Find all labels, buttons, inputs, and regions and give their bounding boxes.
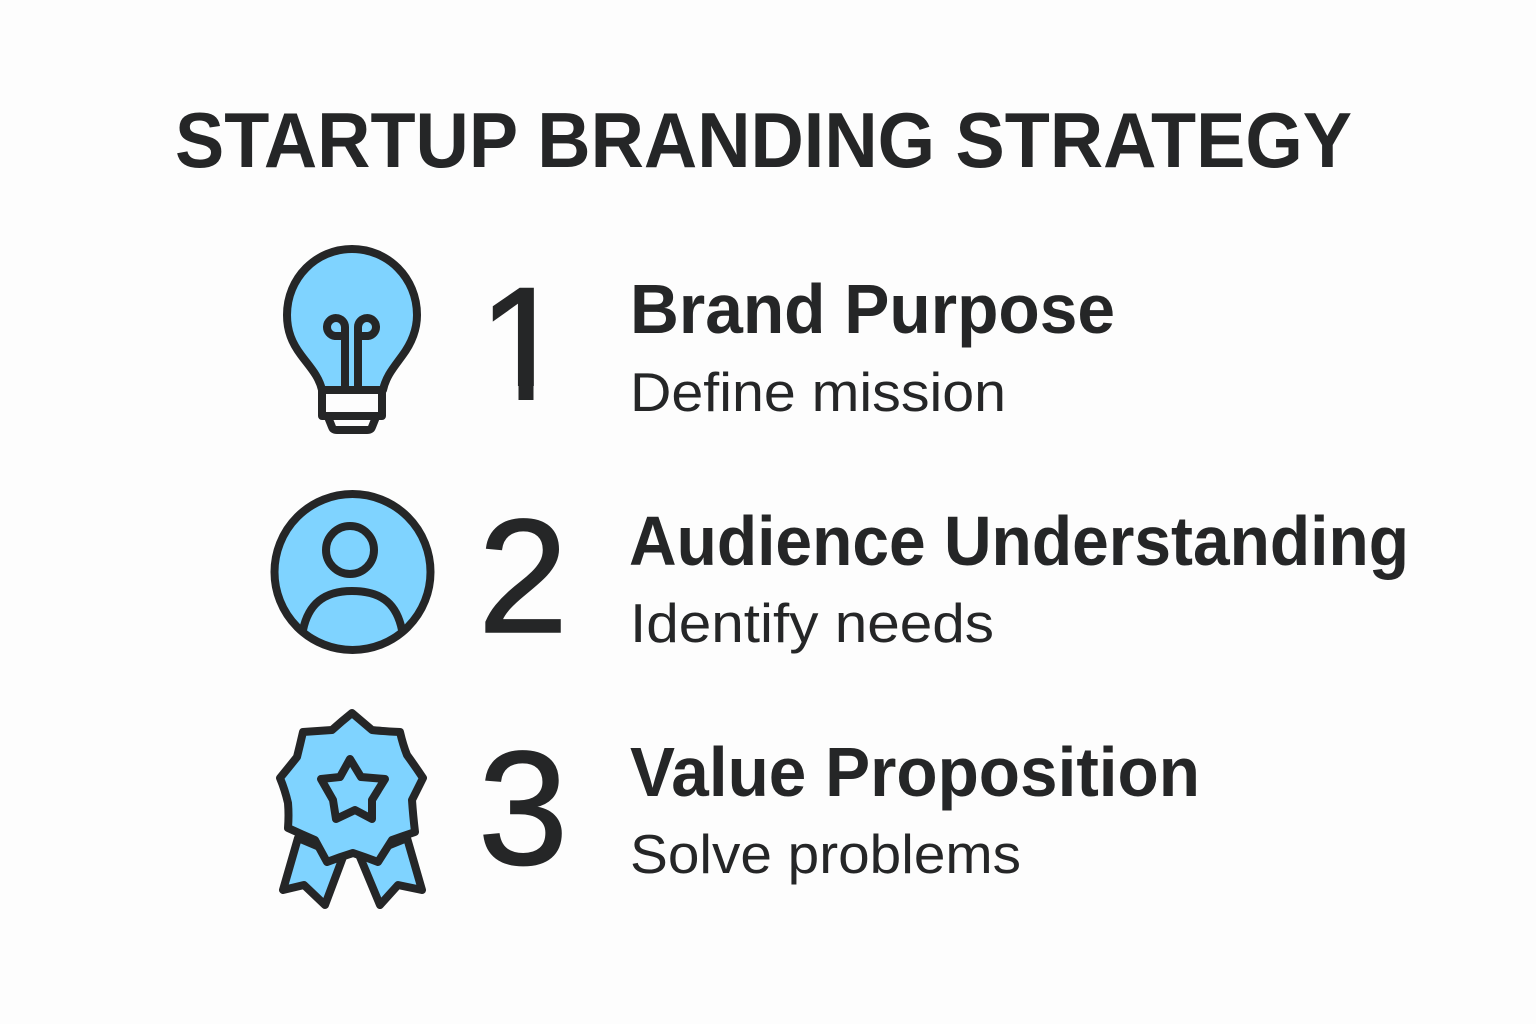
icon: person in circle bbox=[274, 494, 430, 650]
heading: brand purpose: Brand Purpose bbox=[630, 270, 1115, 348]
step 2: audience understanding bbox=[274, 486, 1409, 667]
text: solve problems: Solve problems bbox=[630, 823, 1021, 885]
heading: audience understanding: Audience Understanding bbox=[629, 502, 1409, 580]
number 2: 2 bbox=[478, 486, 568, 667]
step 3: value proposition bbox=[280, 713, 1200, 905]
number 3: 3 bbox=[478, 718, 568, 899]
number 1: 1 bbox=[478, 254, 568, 435]
icon: award ribbon badge bbox=[280, 713, 423, 905]
title: STARTUP BRANDING STRATEGY bbox=[175, 96, 1352, 184]
text: identify needs: Identify needs bbox=[630, 592, 994, 654]
icon: light bulb bbox=[287, 249, 417, 430]
step 1: brand purpose bbox=[287, 249, 1115, 435]
text: define mission: Define mission bbox=[630, 361, 1006, 423]
heading: value proposition: Value Proposition bbox=[630, 733, 1200, 811]
